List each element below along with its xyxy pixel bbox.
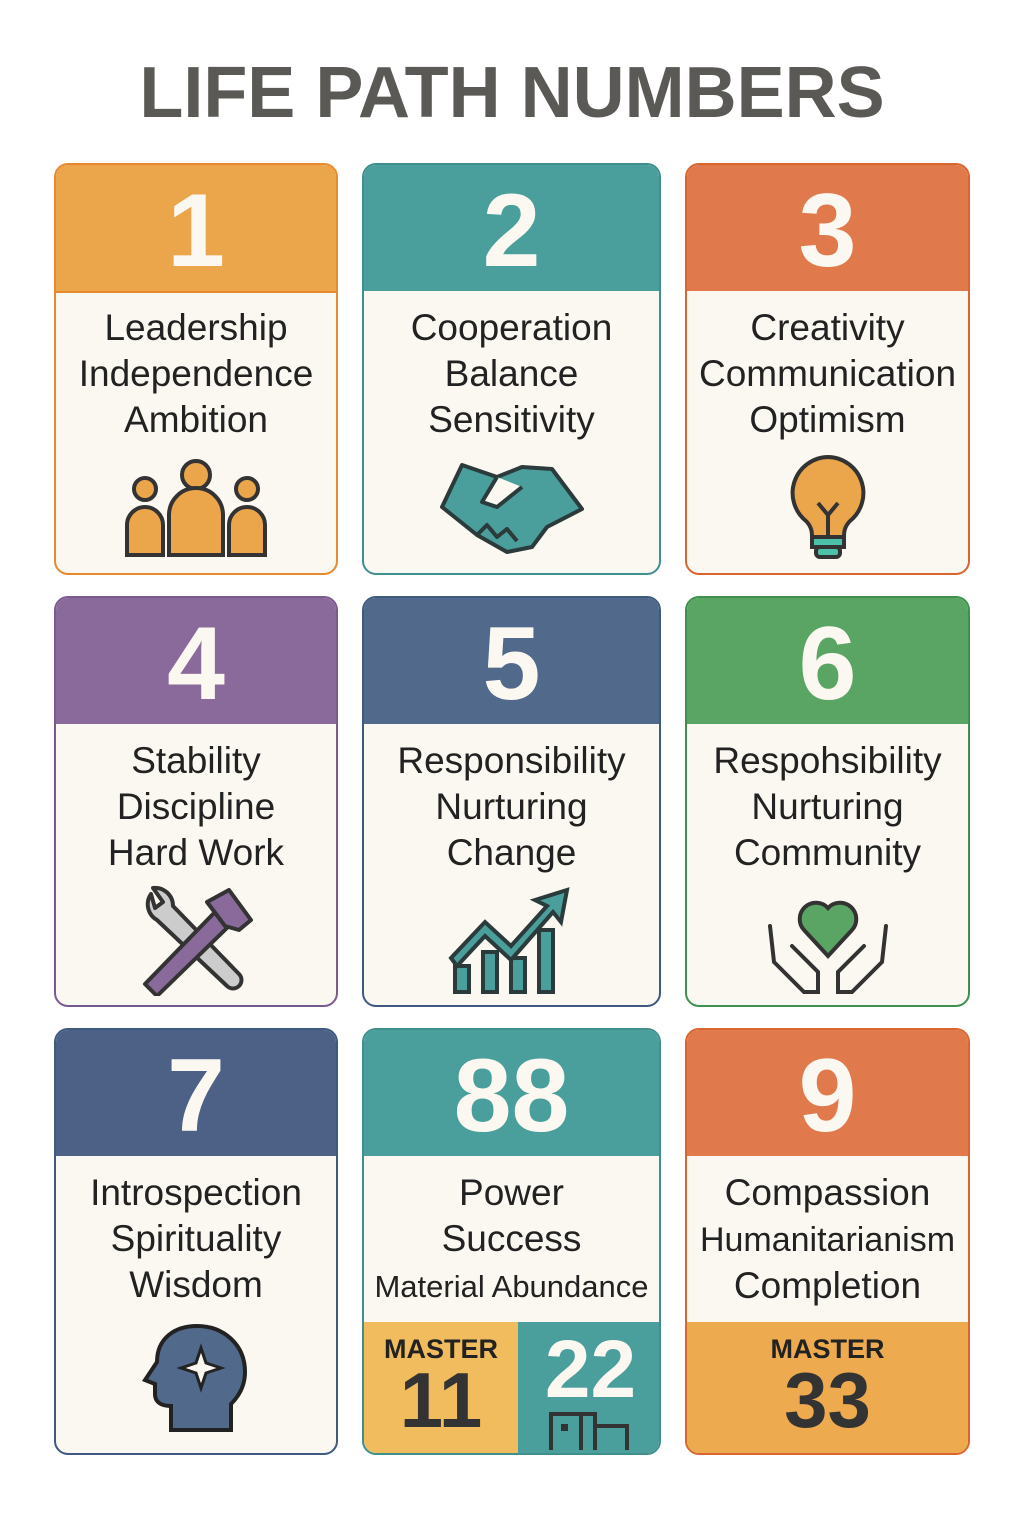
text: traits 8 [374,1172,649,1304]
number 7: 7 [167,1038,225,1154]
text: traits 1: Ambition [124,399,268,440]
panel: 6 [685,596,970,1007]
icon: tools [142,886,254,996]
text: traits 7 [90,1172,302,1305]
text: traits 3 [699,307,956,440]
number 6: 6 [799,606,856,722]
text: traits 9: Compassion [725,1172,930,1213]
text: traits 5: Change [447,832,576,873]
icon: light bulb [790,455,866,559]
text: traits 4: Stability [131,740,261,781]
number 2 [364,165,659,291]
number 9 [687,1030,968,1156]
text: traits 5 [397,740,626,873]
text: traits 9: Completion [734,1265,921,1306]
master 33: 33 [784,1356,871,1444]
text: traits 1: Independence [79,353,313,394]
master 11: 11 [400,1356,482,1444]
icon: head with star [142,1324,247,1432]
text: traits 4: Hard Work [108,832,284,873]
text: traits 3: Creativity [750,307,905,348]
text: traits 9 [700,1172,955,1306]
panel: 5 [362,596,661,1007]
panel: 7 [54,1028,338,1455]
panel: 3 [685,163,970,575]
number 4 [56,598,336,724]
panel: 9 / master 33 [685,1028,970,1455]
number 88 [364,1030,659,1156]
text: traits 9: Humanitarianism [700,1221,955,1259]
master 33: MASTER [770,1334,884,1364]
text: traits 4 [108,740,284,873]
text: traits 7: Spirituality [111,1218,281,1259]
icon: growth chart [448,887,570,994]
text: traits 5: Nurturing [435,786,588,827]
text: traits 8: Power [459,1172,564,1213]
panel: 8 / master 11 / 22 [362,1028,661,1455]
icon: handshake [440,463,584,554]
panel: 1 [54,163,338,575]
text: traits 5: Responsibility [397,740,626,781]
panel: 4 [54,596,338,1007]
text: traits 1 [79,307,313,440]
text: traits 2: Balance [445,353,578,394]
text: traits 4: Discipline [117,786,275,827]
text: traits 6: Community [734,832,921,873]
text: traits 8: Material Abundance [374,1269,649,1304]
text: traits 3: Optimism [749,399,906,440]
text: traits 7: Introspection [90,1172,302,1213]
number 3: 3 [799,173,856,289]
number 1: 1 [167,173,225,289]
number 88: 88 [454,1038,569,1154]
master 33 [687,1322,968,1457]
text: traits 2: Sensitivity [428,399,595,440]
number 7 [56,1030,336,1156]
number 3 [687,165,968,291]
panel: 2 [362,163,661,575]
text: traits 3: Communication [699,353,956,394]
icon: building [549,1412,629,1450]
text: traits 2: Cooperation [411,307,612,348]
number 1 [56,165,336,293]
icon: heart in hands [768,900,888,994]
master 22 [518,1322,663,1457]
text: traits 6: Nurturing [751,786,904,827]
title: LIFE PATH NUMBERS [139,53,885,133]
master 22: 22 [545,1324,636,1415]
text: traits 7: Wisdom [129,1264,263,1305]
text: traits 6 [713,740,942,873]
text: traits 6: Respohsibility [713,740,942,781]
icon: people [125,459,267,557]
number 5: 5 [483,606,540,722]
text: traits 1: Leadership [104,307,288,348]
number 9: 9 [799,1038,856,1154]
number 6 [687,598,968,724]
master 11 [364,1322,518,1457]
number 5 [364,598,659,724]
number 4: 4 [167,606,225,722]
number 2: 2 [483,173,540,289]
master 11: MASTER [384,1334,498,1364]
text: traits 8: Success [442,1218,581,1259]
text: traits 2 [411,307,612,440]
